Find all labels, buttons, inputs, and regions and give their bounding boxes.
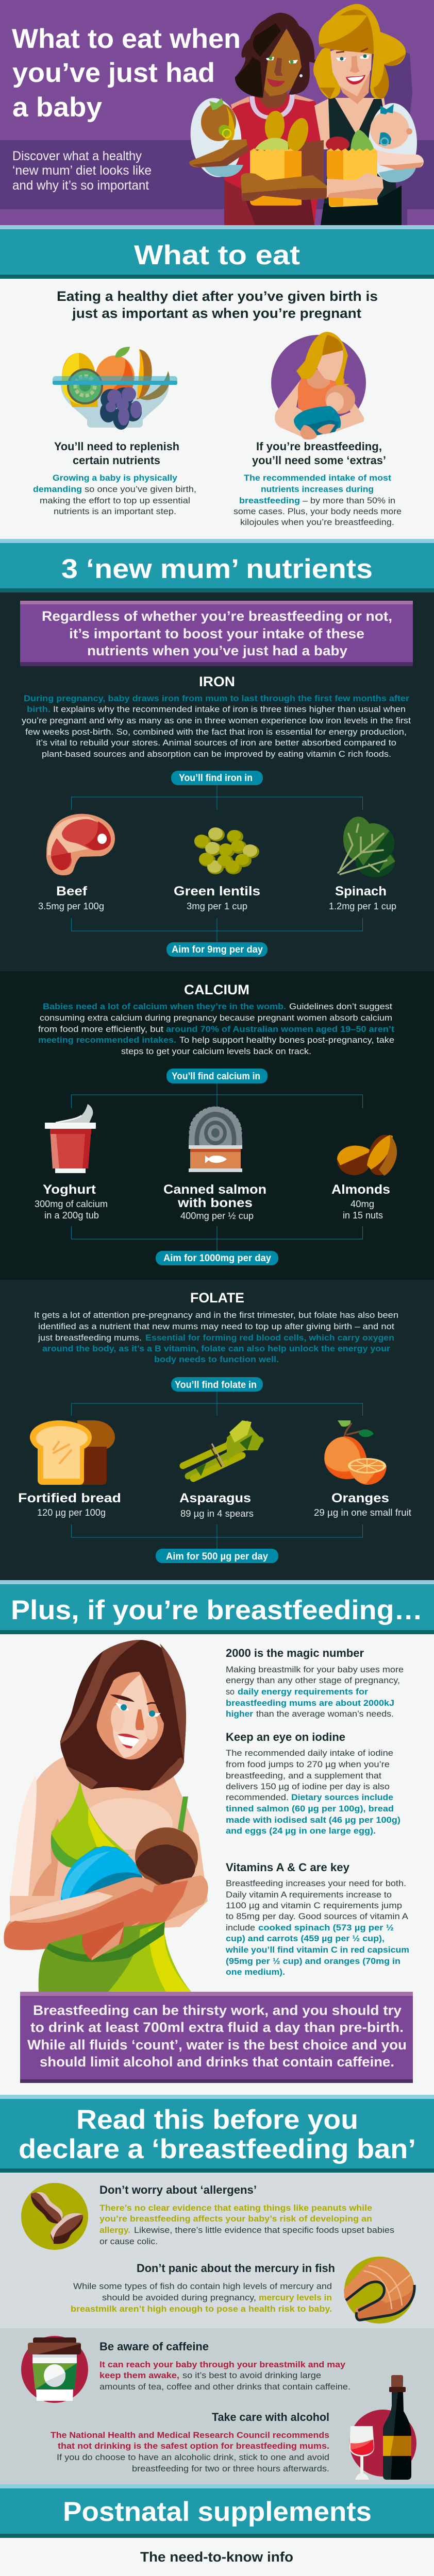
text: replenish nutrients: Growing a baby is physically (53, 473, 178, 483)
text: folate description: around the body, as it’s a B vitamin, folate can also help unlock the energy your (42, 1344, 391, 1353)
text: replenish nutrients: so once you’ve given birth, (85, 485, 196, 494)
icon: spinach (338, 817, 395, 877)
icon: coffee cup (21, 2336, 88, 2403)
text: vitamins A and C: one medium). (226, 1968, 285, 1977)
panel: postnatal supplements (0, 2538, 434, 2576)
connector: folate sources (71, 1392, 363, 1416)
label: green lentils (174, 884, 260, 911)
text: replenish nutrients: making the effort to top up essential (40, 496, 190, 505)
grocery bags (250, 110, 378, 207)
lead statement (57, 289, 378, 321)
text: folate description (34, 1311, 398, 1364)
neck (97, 1749, 173, 1791)
text: keep an eye on iodine: breastfeeding, and a supplement that (226, 1771, 381, 1781)
text: iron description: During pregnancy, baby draws iron from mum to last through the first few months after (24, 694, 410, 703)
icon: fortified bread (30, 1420, 115, 1485)
text: replenish nutrients: nutrients is an important step. (54, 507, 176, 516)
icon: oranges (324, 1420, 387, 1485)
text: folate description: body needs to function well. (154, 1355, 279, 1364)
text: mercury: mercury levels in (259, 2293, 332, 2302)
text: caffeine: Be aware of caffeine (99, 2340, 209, 2353)
text: 2000 is the magic number: so (226, 1687, 235, 1697)
hero subtitle (12, 149, 152, 193)
panel: caffeine and alcohol (0, 2328, 434, 2484)
text: breastfeeding extras: you’ll need some ‘extras’ (252, 454, 386, 467)
text: calcium description: meeting recommended intakes. (38, 1036, 176, 1045)
callout: boost your intake: it’s important to boost your intake of these (69, 626, 364, 641)
arms (4, 1875, 208, 1950)
text: keep an eye on iodine: and eggs (24 µg in one large egg). (226, 1826, 376, 1836)
text: breastfeeding extras: The recommended intake of most (244, 473, 392, 483)
panel: 3 new mum nutrients header (0, 539, 434, 592)
panel: allergens and mercury (0, 2173, 434, 2328)
text: 2000 is the magic number: energy than any other stage of pregnancy, (226, 1676, 400, 1685)
panel: postnatal supplements header (0, 2484, 434, 2538)
woman with blonde hair (313, 4, 406, 225)
label: canned salmon: with bones (177, 1196, 253, 1210)
text: allergens: or cause colic. (99, 2237, 158, 2246)
text: keep an eye on iodine (226, 1731, 400, 1836)
label: oranges: 29 µg in one small fruit (314, 1507, 411, 1518)
hair back (60, 1640, 186, 1790)
hero title: What to eat when (12, 24, 241, 54)
text: keep an eye on iodine: tinned salmon (60 µg per 100g), bread (226, 1804, 394, 1814)
text: vitamins A and C: Daily vitamin A requirements increase to (226, 1890, 392, 1900)
connector: iron sources (71, 785, 363, 810)
label: almonds (331, 1182, 390, 1221)
lead statement: just as important as when you’re pregnant (72, 306, 361, 321)
illustration: breastfeeding mother (4, 1640, 208, 1992)
text: iron description: birth. (27, 705, 51, 714)
text: vitamins A and C: cup) and carrots (459 µg per ½ cup), (226, 1934, 385, 1943)
text: caffeine: It can reach your baby through your breastmilk and may (99, 2360, 346, 2369)
text: iron description: few weeks post-birth. So, combined with the fact that iron is essential for energy production, (25, 727, 407, 737)
text: vitamins A and C: while you’ll find vitamin C in red capsicum (225, 1945, 409, 1955)
text: mercury: breastmilk aren’t high enough to pose a health risk to baby. (71, 2304, 332, 2314)
icon: canned salmon (189, 1107, 242, 1172)
label: canned salmon: Canned salmon (163, 1182, 266, 1197)
text: 2000 is the magic number: than the average woman’s needs. (256, 1709, 394, 1719)
label: yoghurt: Yoghurt (43, 1182, 96, 1197)
pill: you'll find calcium in (166, 1069, 268, 1083)
label: almonds: Almonds (331, 1182, 390, 1197)
panel: folate (0, 1280, 434, 1580)
label: yoghurt: 300mg of calcium (35, 1199, 108, 1209)
panel: read this before header: Read this before you (76, 2105, 358, 2135)
text: alcohol: Take care with alcohol (212, 2411, 329, 2424)
panel: what to eat (0, 279, 434, 539)
panel: postnatal supplements header: Postnatal supplements (63, 2497, 372, 2527)
text: keep an eye on iodine: from food jumps to 270 µg when you’re (226, 1760, 390, 1769)
pill: aim for 1000mg per day (156, 1251, 278, 1265)
hero title: a baby (12, 92, 103, 123)
panel: what to eat header (0, 225, 434, 279)
icon: green lentils (194, 827, 259, 874)
label: fortified bread (18, 1491, 121, 1518)
illustration: two mums with babies and groceries (187, 4, 434, 225)
text: vitamins A and C: include (226, 1923, 255, 1933)
text: calcium description: around 70% of Australian women aged 19–50 aren’t (166, 1025, 395, 1034)
callout: fluids: should limit alcohol and drinks that contain caffeine. (40, 2054, 394, 2070)
text: mercury: should be avoided during pregnancy, (102, 2293, 256, 2302)
text: iron description: you’re pregnant and why as many as one in three women experience low iron levels in the first (22, 716, 411, 725)
text: mercury: While some types of fish do contain high levels of mercury and (73, 2282, 332, 2291)
panel: plus if you're breastfeeding header: Plus, if you’re breastfeeding… (11, 1595, 423, 1625)
text: breastfeeding extras: some cases. Plus, your body needs more (233, 507, 402, 516)
face (97, 1672, 164, 1759)
label: beef (38, 884, 104, 911)
text: 2000 is the magic number: higher (226, 1709, 254, 1719)
panel: plus if you're breastfeeding header (0, 1580, 434, 1634)
text: alcohol: The National Health and Medical Research Council recommends (51, 2431, 329, 2440)
text: iron description (22, 694, 411, 759)
heading: calcium: CALCIUM (184, 982, 249, 997)
text: calcium description: Guidelines don’t suggest (289, 1002, 392, 1011)
pill: aim for 9mg per day: Aim for 9mg per day (172, 944, 263, 955)
hero subtitle: and why it’s so important (12, 178, 149, 193)
arms holding bags (241, 173, 330, 201)
icon: salmon (344, 2257, 414, 2324)
text: vitamins A and C: 1100 µg and vitamin C requirements jump (226, 1901, 402, 1910)
text: allergens: you’re breastfeeding affects your baby’s risk of developing an (99, 2214, 372, 2224)
heading: need to know: The need-to-know info (140, 2549, 293, 2565)
icon: wine (349, 2375, 416, 2480)
pill: aim for 1000mg per day: Aim for 1000mg per day (163, 1253, 271, 1264)
panel: calcium (0, 971, 434, 1280)
connector: calcium sources (71, 1083, 363, 1108)
skirt (39, 1922, 191, 1992)
label: beef: 3.5mg per 100g (38, 901, 104, 911)
label: fortified bread: Fortified bread (18, 1491, 121, 1505)
pill: you'll find folate in: You’ll find folate in (175, 1380, 257, 1391)
baby in left arm (187, 95, 245, 180)
text: breastfeeding extras: kilojoules when you’re breastfeeding. (240, 518, 394, 527)
pill: aim for 500 µg per day: Aim for 500 µg per day (166, 1551, 268, 1562)
callout: fluids: Breastfeeding can be thirsty work, and you should try (33, 2003, 402, 2018)
callout: boost your intake (20, 601, 413, 666)
hero subtitle: ‘new mum’ diet looks like (12, 163, 152, 178)
text: caffeine: amounts of tea, coffee and other drinks that contain caffeine. (99, 2382, 350, 2392)
text: calcium description: consuming extra calcium during pregnancy because pregnant women absorb calcium (40, 1013, 392, 1023)
label: asparagus (179, 1491, 254, 1519)
text: 2000 is the magic number: 2000 is the magic number (226, 1647, 364, 1659)
label: oranges (314, 1491, 411, 1518)
connector: folate target (71, 1524, 363, 1549)
label: asparagus: Asparagus (179, 1491, 251, 1505)
label: beef: Beef (56, 884, 88, 899)
text: allergens: There’s no clear evidence that eating things like peanuts while (99, 2204, 372, 2213)
pill: you'll find iron in: You’ll find iron in (179, 773, 253, 784)
text: vitamins A and C: cooked spinach (573 µg per ½ (258, 1923, 394, 1933)
hero subtitle: Discover what a healthy (12, 149, 142, 163)
pill: you'll find iron in (171, 771, 263, 785)
body and shoulders (10, 1752, 208, 1937)
text: calcium description: To help support healthy bones post-pregnancy, take (179, 1036, 394, 1045)
text: alcohol (51, 2411, 329, 2473)
panel: breastfeeding (0, 1634, 434, 2095)
text: allergens: Don’t worry about ‘allergens’ (99, 2183, 257, 2196)
text: breastfeeding extras: If you’re breastfeeding, (256, 440, 382, 453)
label: asparagus: 89 µg in 4 spears (180, 1509, 254, 1519)
text: vitamins A and C: to 85mg per day. Good sources of vitamin A (226, 1912, 408, 1921)
arm holding baby (189, 139, 248, 167)
text: replenish nutrients (33, 440, 196, 516)
text: 2000 is the magic number: Making breastmilk for your baby uses more (226, 1665, 404, 1674)
text: replenish nutrients: certain nutrients (73, 454, 160, 467)
text: alcohol: breastfeeding for two or three hours afterwards. (132, 2464, 329, 2473)
text: keep an eye on iodine: made with iodised salt (46 µg per 100g) (226, 1816, 400, 1825)
label: canned salmon (163, 1182, 266, 1221)
pill: you'll find calcium in: You’ll find calcium in (172, 1071, 260, 1082)
text: keep an eye on iodine: Dietary sources include (291, 1793, 393, 1802)
text: vitamins A and C (225, 1861, 409, 1977)
woman with dark hair (224, 13, 324, 225)
text: calcium description: steps to get your calcium levels back on track. (121, 1047, 311, 1056)
text: iron description: plant-based sources and absorption can be improved by eating vitamin C rich foods. (42, 750, 391, 759)
text: breastfeeding extras (233, 440, 402, 527)
icon: breastfeeding mother (271, 332, 366, 439)
connector: calcium target (71, 1226, 363, 1251)
text: folate description: identified as a nutrient that new mums may need to top up after giving birth – and not (38, 1322, 394, 1331)
pill: aim for 500 µg per day (156, 1549, 278, 1563)
text: folate description: Essential for forming red blood cells, which carry oxygen (145, 1333, 394, 1343)
text: breastfeeding extras: – by more than 50% in (303, 496, 395, 505)
panel: read this before header (0, 2095, 434, 2173)
green bra (51, 1779, 129, 1875)
hero title (12, 24, 241, 123)
label: canned salmon: 400mg per ½ cup (180, 1211, 254, 1221)
text: caffeine: keep them awake, (99, 2371, 179, 2380)
text: 2000 is the magic number (226, 1647, 404, 1719)
label: fortified bread: 120 µg per 100g (37, 1507, 106, 1518)
panel: read this before header: declare a ‘breastfeeding ban’ (19, 2134, 416, 2164)
text: mercury (71, 2262, 335, 2314)
text: replenish nutrients: demanding (33, 485, 82, 494)
lead statement: Eating a healthy diet after you’ve given birth is (57, 289, 378, 304)
panel: hero (0, 0, 434, 225)
text: allergens (99, 2183, 394, 2246)
heading: folate: FOLATE (190, 1290, 244, 1306)
hero title: you’ve just had (12, 58, 215, 88)
icon: peanuts (21, 2183, 88, 2250)
text: vitamins A and C: (95mg per ½ cup) and oranges (70mg in (226, 1957, 400, 1966)
text: calcium description: from food more efficiently, but (38, 1025, 163, 1034)
text: caffeine (99, 2340, 350, 2392)
icon: yoghurt (45, 1104, 96, 1173)
label: spinach (329, 884, 396, 911)
text: caffeine: so it’s best to avoid drinking large (182, 2371, 321, 2380)
text: keep an eye on iodine: recommended. (226, 1793, 289, 1802)
text: keep an eye on iodine: delivers 150 µg of iodine per day is also (226, 1782, 390, 1791)
label: green lentils: Green lentils (174, 884, 260, 899)
text: alcohol: that not drinking is the safest option for breastfeeding mums. (58, 2442, 329, 2451)
text: allergens: Likewise, there’s little evidence that specific foods upset babies (134, 2226, 394, 2235)
label: spinach: Spinach (335, 884, 387, 899)
text: breastfeeding extras: breastfeeding (239, 496, 300, 505)
label: spinach: 1.2mg per 1 cup (329, 901, 396, 911)
callout: boost your intake: nutrients when you’ve just had a baby (87, 643, 347, 658)
icon: fruit bowl (53, 347, 177, 430)
callout: fluids: to drink at least 700ml extra fluid a day than pre-birth. (30, 2020, 404, 2035)
callout: fluids (20, 1992, 413, 2083)
text: alcohol: If you do choose to have an alcoholic drink, stick to one and avoid (57, 2453, 329, 2462)
label: yoghurt (35, 1182, 108, 1221)
text: calcium description: Babies need a lot of calcium when they’re in the womb. (43, 1002, 286, 1011)
label: yoghurt: in a 200g tub (44, 1210, 99, 1221)
text: 2000 is the magic number: breastfeeding mums are about 2000kJ (226, 1699, 394, 1708)
text: iron description: It explains why the recommended intake of iron is three times higher than usual when (53, 705, 406, 714)
icon: beef (46, 814, 115, 875)
icon: almonds (337, 1132, 400, 1178)
text: breastfeeding extras: nutrients increases during (261, 485, 374, 494)
label: almonds: in 15 nuts (343, 1210, 383, 1221)
text: keep an eye on iodine: The recommended daily intake of iodine (226, 1749, 393, 1758)
heading: iron: IRON (199, 674, 235, 689)
text: keep an eye on iodine: Keep an eye on iodine (226, 1731, 345, 1743)
text: vitamins A and C: Vitamins A & C are key (226, 1861, 350, 1874)
text: iron description: it’s vital to rebuild your stores. Animal sources of iron are better absorbed compared to (36, 738, 396, 748)
text: calcium description (38, 1002, 395, 1056)
panel: what to eat header: What to eat (134, 240, 300, 270)
text: mercury: Don’t panic about the mercury in fish (137, 2262, 335, 2275)
text: folate description: just breastfeeding mums. (38, 1333, 142, 1343)
baby in right arm (369, 103, 424, 182)
icon: asparagus (183, 1420, 263, 1479)
callout: fluids: While all fluids ‘count’, water is the best choice and you (27, 2037, 407, 2053)
panel: 3 new mum nutrients header: 3 ‘new mum’ nutrients (61, 554, 373, 584)
callout: boost your intake: Regardless of whether you’re breastfeeding or not, (42, 608, 392, 624)
label: oranges: Oranges (331, 1491, 389, 1505)
panel: iron (0, 592, 434, 971)
text: 2000 is the magic number: daily energy requirements for (238, 1687, 369, 1697)
text: folate description: It gets a lot of attention pre-pregnancy and in the first trimester, but folate has also been (34, 1311, 398, 1320)
connector: iron target (71, 918, 363, 942)
label: almonds: 40mg (350, 1199, 374, 1209)
baby (61, 1846, 147, 1906)
text: replenish nutrients: You’ll need to replenish (54, 440, 179, 453)
label: green lentils: 3mg per 1 cup (187, 901, 247, 911)
text: vitamins A and C: Breastfeeding increases your need for both. (226, 1879, 406, 1888)
text: allergens: allergy. (99, 2226, 130, 2235)
